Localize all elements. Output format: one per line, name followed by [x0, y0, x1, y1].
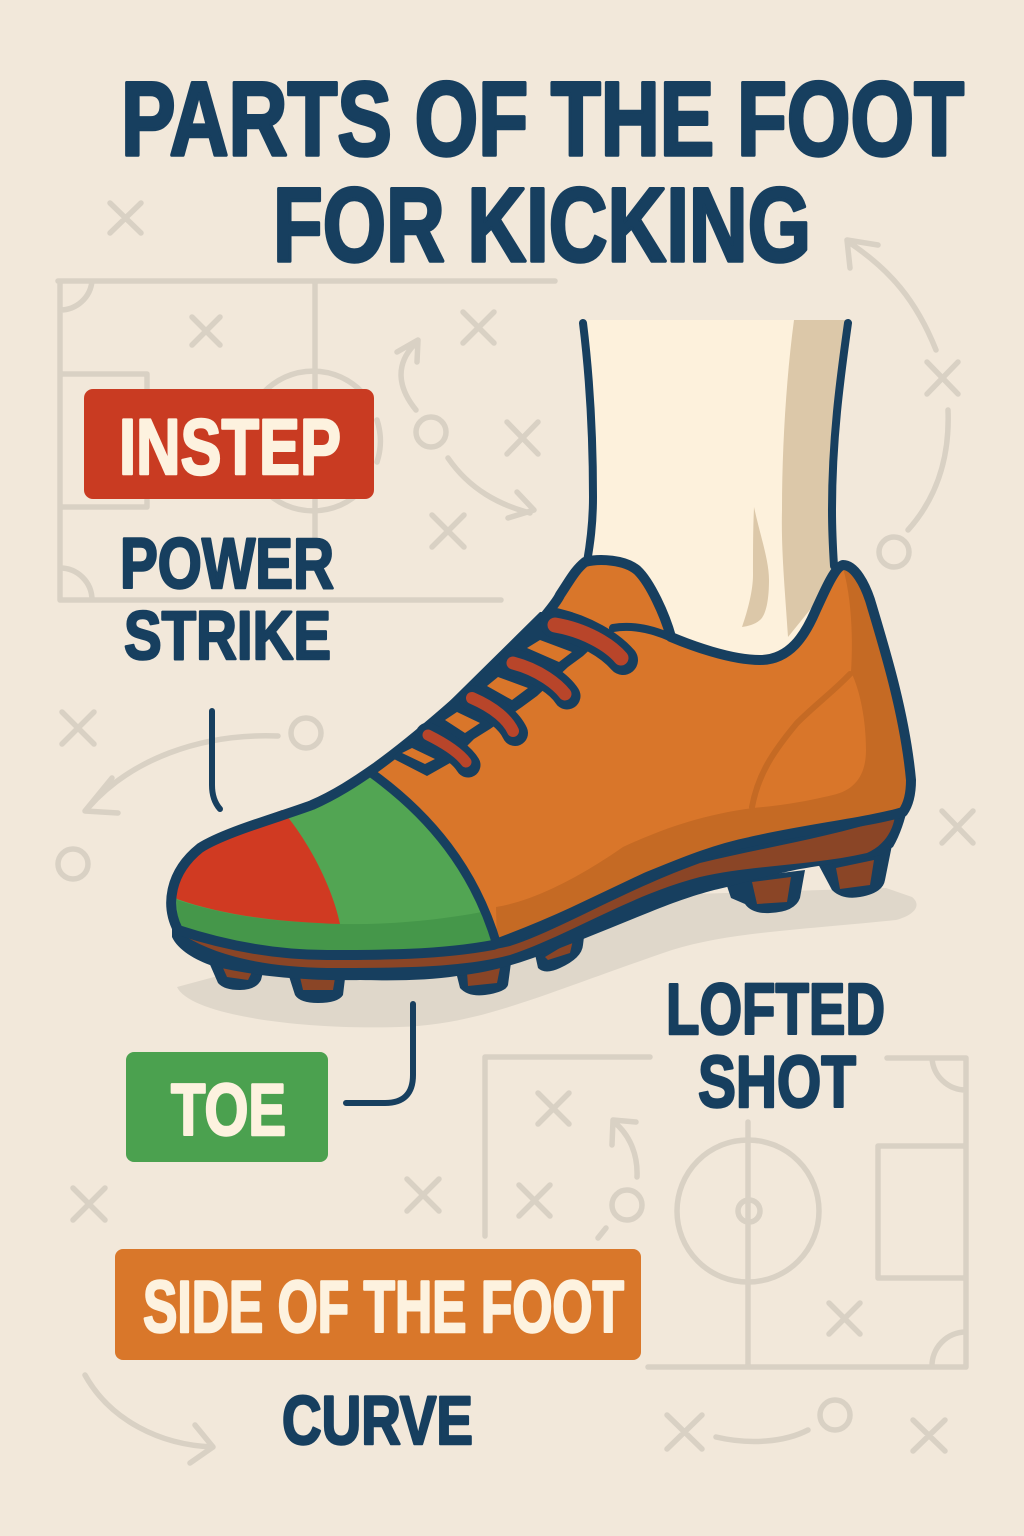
title: [121, 61, 964, 284]
background: top-left pitch diagram: [58, 281, 555, 600]
toe: green panel: [171, 770, 495, 955]
background: tactical marks: [58, 203, 973, 1463]
power strike caption: STRIKE: [124, 597, 331, 674]
side of the foot label: SIDE OF THE FOOT: [143, 1267, 624, 1348]
ground shadow: [177, 888, 917, 1027]
power strike caption: [120, 525, 334, 674]
title: FOR KICKING: [273, 167, 811, 284]
upper: orange body: [375, 560, 911, 945]
lofted shot caption: [666, 970, 885, 1123]
side of the foot label: [115, 1249, 641, 1360]
boot outline: [370, 772, 497, 945]
toe: red cap: [175, 810, 340, 924]
toe: green band: [177, 900, 494, 955]
leader line: toe: [346, 1004, 413, 1103]
instep label: INSTEP: [119, 402, 341, 491]
collar stitch line: [613, 627, 672, 638]
leg: [583, 320, 848, 665]
lofted shot caption: LOFTED: [666, 970, 885, 1050]
laces: [392, 612, 623, 776]
lofted shot caption: SHOT: [698, 1042, 856, 1123]
upper: heel stitching: [752, 674, 850, 807]
illustration: kicking boot and leg: [171, 320, 917, 1027]
leader line: instep: [212, 711, 220, 809]
upper: heel shading: [496, 568, 911, 945]
power strike caption: POWER: [120, 525, 334, 604]
cleats: [208, 840, 893, 1003]
instep label: [84, 389, 374, 499]
sole: [172, 805, 908, 980]
curve caption: CURVE: [282, 1382, 473, 1459]
background: bottom-right pitch diagram: [485, 1057, 966, 1367]
toe label: [126, 1052, 328, 1162]
toe label: TOE: [171, 1070, 286, 1151]
